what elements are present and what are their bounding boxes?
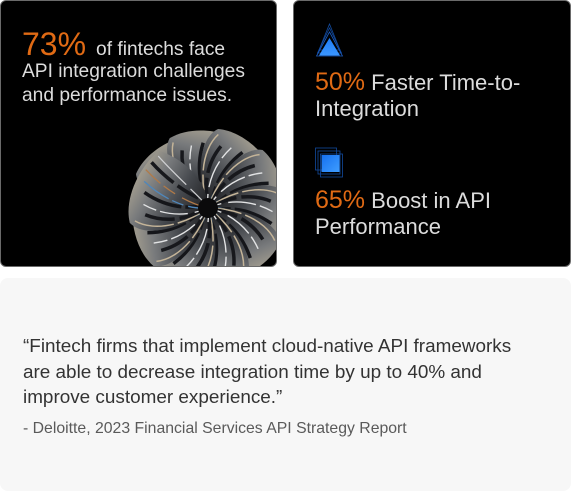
source attribution: - Deloitte, 2023 Financial Services API Strategy Report [23,420,407,437]
quote text: are able to decrease integration time by up to 40% and [23,362,482,383]
panel: quote [0,278,571,491]
statistic text: 50% faster [315,68,520,121]
statistic text: 50% faster: 50% Faster Time-to- [315,68,520,96]
icon: stacked squares [315,148,343,178]
statistic text: 65% boost: Performance [315,214,441,239]
statistic text: 50% faster: Integration [315,96,419,121]
statistic text: 73% of fintechs [22,26,245,106]
panel: fintech challenges [0,0,277,267]
statistic text: 73% of fintechs: 73% of fintechs face [22,26,225,62]
quote text: “Fintech firms that implement cloud-native API frameworks [23,336,511,357]
quote text [23,336,511,408]
statistic text: 73% of fintechs: and performance issues. [22,85,232,106]
quote text: improve customer experience.” [23,387,282,408]
statistic text: 65% boost: 65% Boost in API [315,186,491,214]
statistic text: 73% of fintechs: API integration challenges [22,61,245,82]
panel: benefits [293,0,571,267]
statistic text: 65% boost [315,186,491,239]
icon: stacked triangles [316,23,344,56]
image: iridescent swirl [128,129,276,266]
